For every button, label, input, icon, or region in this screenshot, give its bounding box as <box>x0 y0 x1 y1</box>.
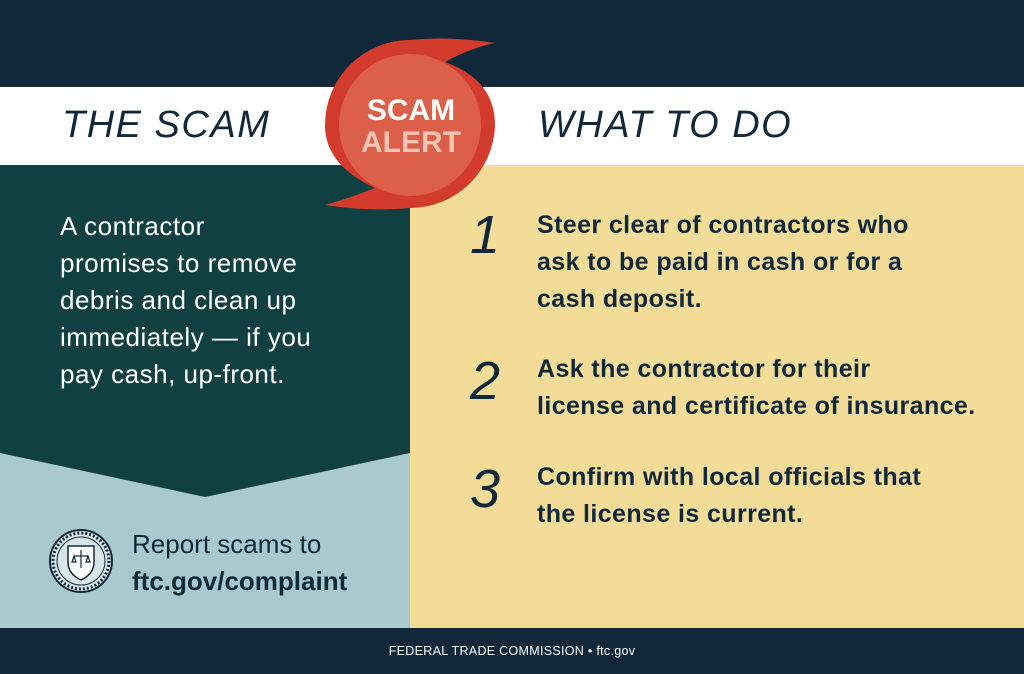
step 1: ask to be paid in cash or for a <box>537 248 902 276</box>
footer <box>0 628 1024 674</box>
footer: FEDERAL TRADE COMMISSION • ftc.gov <box>389 644 635 658</box>
panel: the scam <box>0 165 410 628</box>
scam description: immediately — if you <box>60 322 311 352</box>
icon: scam alert hurricane: ALERT <box>361 126 461 159</box>
scam description <box>60 211 311 389</box>
step 1: cash deposit. <box>537 285 702 313</box>
icon: scam alert hurricane: SCAM <box>367 94 455 127</box>
report text <box>132 529 347 596</box>
header band <box>0 87 1024 165</box>
step 2 <box>470 351 976 420</box>
step 3: Confirm with local officials that <box>537 463 921 491</box>
icon: scam alert hurricane <box>325 38 495 210</box>
step 1: 1 <box>470 205 500 265</box>
panel: what to do <box>410 165 1024 628</box>
scam description: pay cash, up-front. <box>60 359 285 389</box>
step 2: 2 <box>470 351 500 411</box>
top band <box>0 0 1024 87</box>
step 3: 3 <box>470 459 500 519</box>
scam description: debris and clean up <box>60 285 296 315</box>
heading: the scam: THE SCAM <box>62 104 270 146</box>
step 3: the license is current. <box>537 500 803 528</box>
heading: what to do: WHAT TO DO <box>538 104 792 146</box>
step 1: Steer clear of contractors who <box>537 211 909 239</box>
icon: FTC seal <box>49 529 113 593</box>
step 2: Ask the contractor for their <box>537 355 870 383</box>
report text: Report scams to <box>132 529 321 559</box>
step 1 <box>470 205 909 313</box>
scam description: promises to remove <box>60 248 297 278</box>
report text: ftc.gov/complaint <box>132 566 347 596</box>
step 2: license and certificate of insurance. <box>537 392 976 420</box>
step 3 <box>470 459 921 528</box>
scam description: A contractor <box>60 211 205 241</box>
